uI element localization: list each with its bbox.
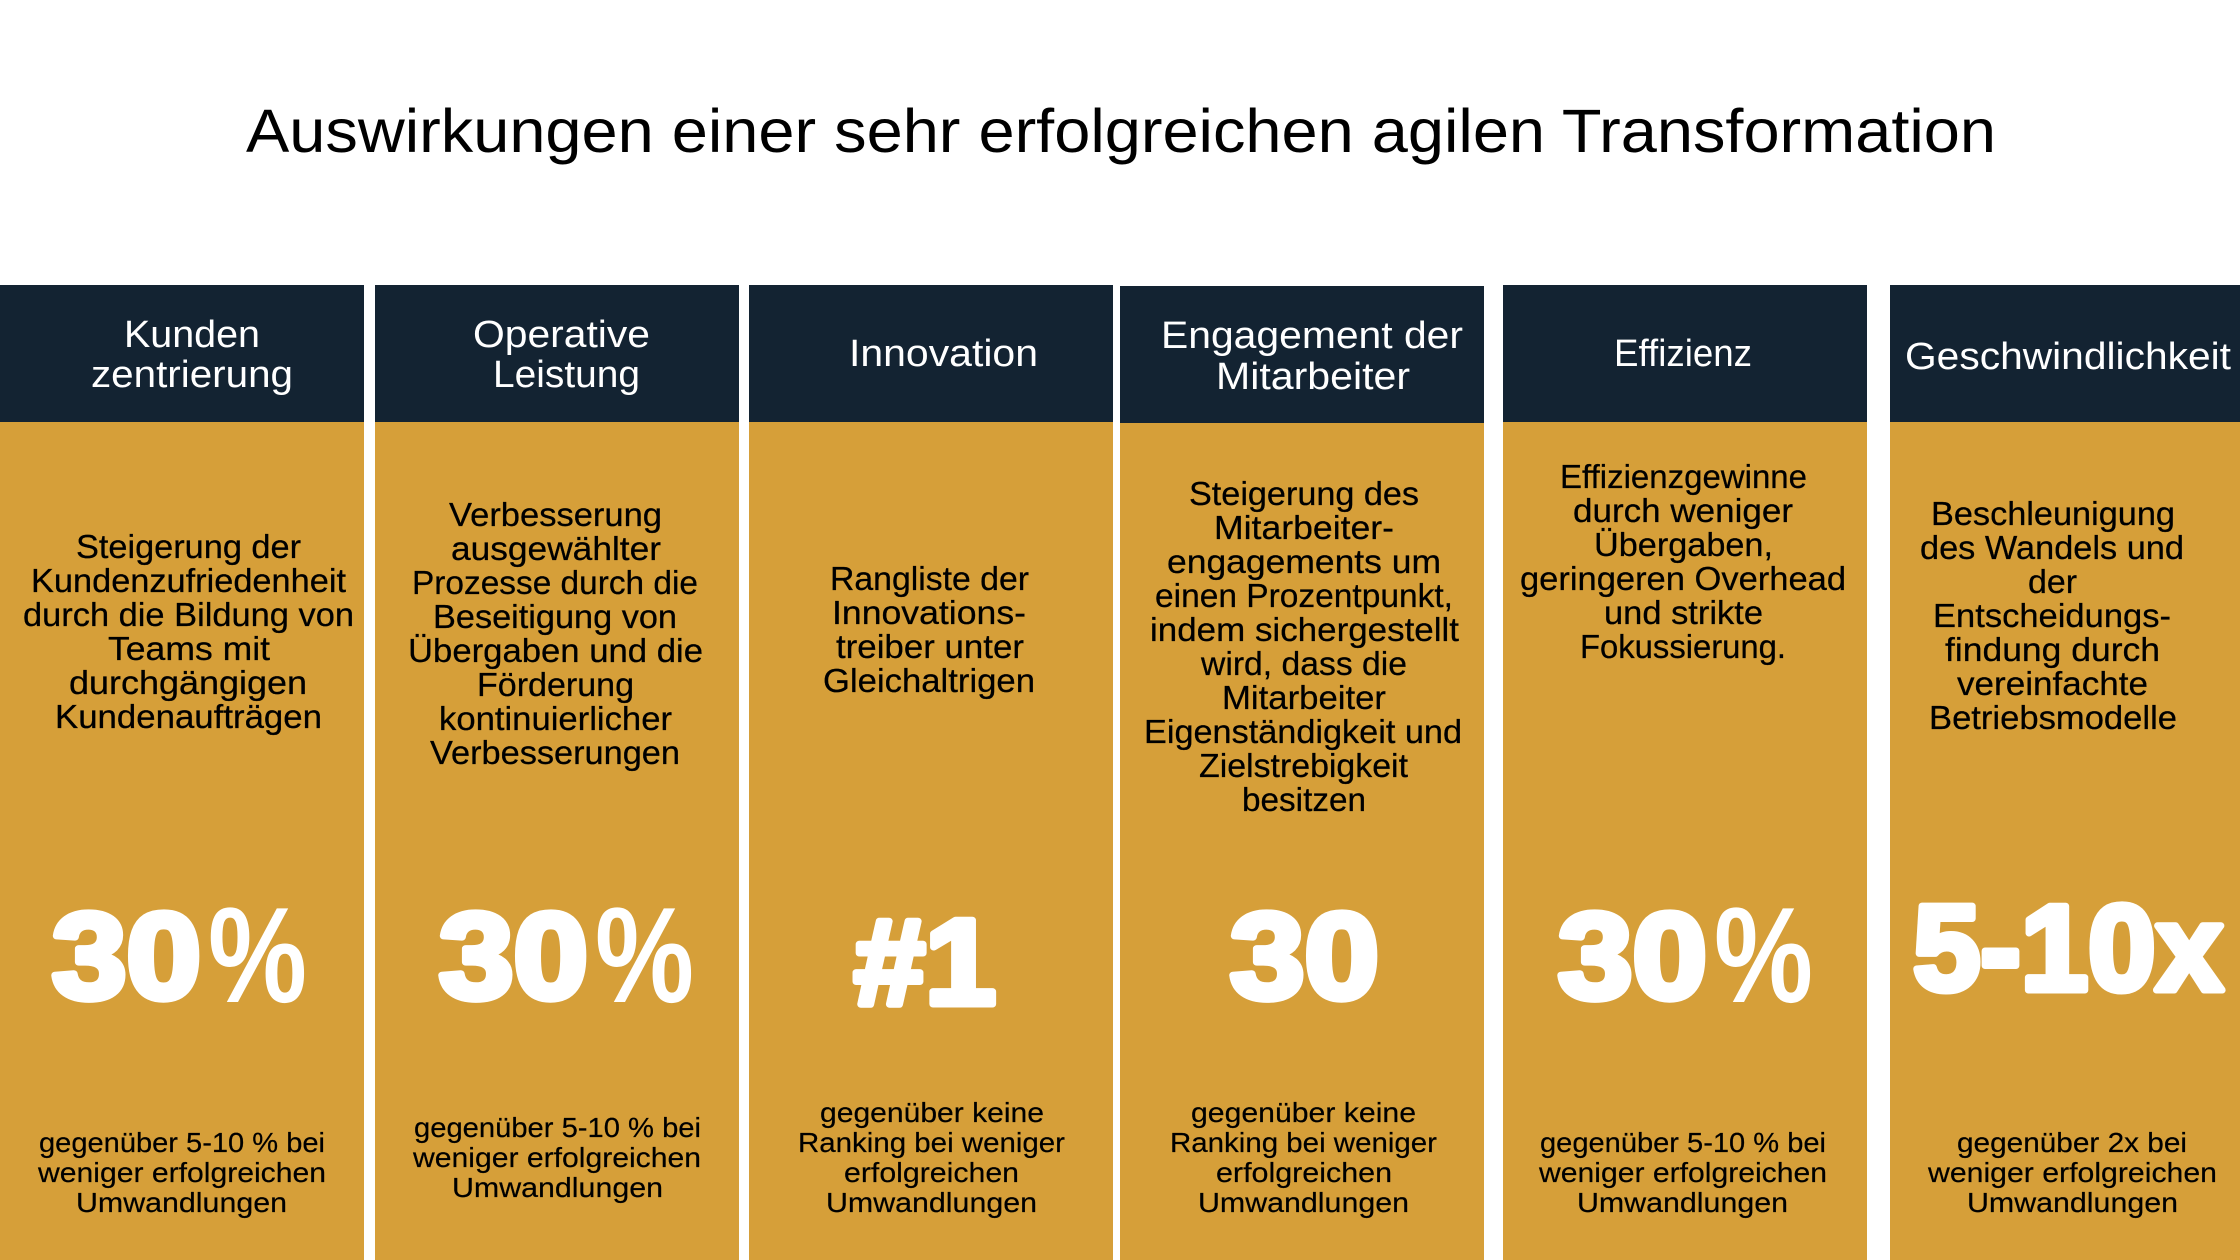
description text: [408, 496, 703, 771]
description text: Mitarbeiter: [1222, 679, 1386, 716]
header: Kundenzentrierung: Kunden: [124, 314, 260, 356]
description text: Mitarbeiter-: [1214, 509, 1394, 546]
description text: Eigenständigkeit und: [1144, 713, 1462, 750]
header: Engagement der Mitarbeiter: Mitarbeiter: [1216, 356, 1410, 398]
comparison text: Umwandlungen: [826, 1187, 1037, 1218]
comparison text: Umwandlungen: [1967, 1187, 2178, 1218]
comparison text: gegenüber 5-10 % bei: [414, 1112, 701, 1143]
description text: Kundenzufriedenheit: [31, 562, 346, 599]
panel background: [1890, 422, 2240, 1260]
description text: Entscheidungs-: [1933, 597, 2171, 634]
header: Effizienz: Effizienz: [1614, 333, 1752, 375]
panel: Kundenzentrierung: [0, 285, 364, 1260]
description text: und strikte: [1604, 594, 1763, 631]
description text: treiber unter: [836, 628, 1024, 665]
comparison text: Umwandlungen: [1198, 1187, 1409, 1218]
description text: Steigerung der: [76, 528, 301, 565]
panel background: [749, 422, 1113, 1260]
header: Kundenzentrierung: zentrierung: [91, 354, 293, 396]
description text: Verbesserungen: [430, 734, 680, 771]
description text: des Wandels und: [1920, 529, 2184, 566]
description text: wird, dass die: [1200, 645, 1407, 682]
header: Innovation: Innovation: [849, 333, 1038, 375]
comparison text: weniger erfolgreichen: [37, 1157, 326, 1188]
description text: Prozesse durch die: [412, 564, 698, 601]
panel background: [1120, 423, 1484, 1260]
description text: Rangliste der: [830, 560, 1029, 597]
header: Operative Leistung: Leistung: [493, 354, 640, 396]
description text: Teams mit: [108, 630, 270, 667]
description text: geringeren Overhead: [1520, 560, 1846, 597]
big number: 30%: %: [595, 879, 694, 1031]
description text: kontinuierlicher: [439, 700, 672, 737]
comparison text: Umwandlungen: [1577, 1187, 1788, 1218]
big number: 30%: 30: [1558, 888, 1707, 1024]
big number: 30%: [52, 879, 307, 1031]
comparison text: gegenüber 2x bei: [1957, 1127, 2187, 1158]
comparison text: Ranking bei weniger: [798, 1127, 1065, 1158]
big number: 30%: %: [1714, 879, 1813, 1031]
header: Operative Leistung: Operative: [473, 314, 650, 356]
description text: Innovations-: [832, 594, 1026, 631]
description text: Effizienzgewinne: [1560, 458, 1807, 495]
description text: Beseitigung von: [433, 598, 677, 635]
description text: Steigerung des: [1189, 475, 1419, 512]
header: Operative Leistung: [375, 285, 739, 422]
header: Engagement der Mitarbeiter: Engagement der: [1161, 315, 1463, 357]
comparison text: erfolgreichen: [844, 1157, 1019, 1188]
comparison text: gegenüber keine: [820, 1097, 1044, 1128]
comparison text: [1170, 1097, 1437, 1218]
description text: [23, 528, 354, 735]
comparison text: weniger erfolgreichen: [1538, 1157, 1827, 1188]
description text: Gleichaltrigen: [823, 662, 1035, 699]
description text: Übergaben,: [1594, 526, 1773, 563]
description text: besitzen: [1242, 781, 1366, 818]
header: Geschwindlichkeit: Geschwindlichkeit: [1905, 336, 2231, 378]
comparison text: Ranking bei weniger: [1170, 1127, 1437, 1158]
big number: 30: 30: [1230, 888, 1379, 1024]
big number: 30%: %: [208, 879, 307, 1031]
header: Geschwindlichkeit: [1890, 285, 2240, 422]
description text: [1920, 495, 2184, 736]
description text: durchgängigen: [69, 664, 307, 701]
panel background: [1503, 422, 1867, 1260]
big number: 30%: 30: [52, 888, 201, 1024]
description text: Fokussierung.: [1580, 628, 1786, 665]
header: Innovation: [749, 285, 1113, 422]
header: Effizienz: [1503, 285, 1867, 422]
panel background: [375, 422, 739, 1260]
description text: engagements um: [1167, 543, 1441, 580]
panel: Geschwindlichkeit: [1890, 285, 2240, 1260]
title: Auswirkungen einer sehr erfolgreichen agilen Transformation: [246, 97, 1996, 165]
comparison text: [412, 1112, 701, 1203]
comparison text: [798, 1097, 1065, 1218]
panel background: [0, 422, 364, 1260]
comparison text: Umwandlungen: [452, 1172, 663, 1203]
comparison text: Umwandlungen: [76, 1187, 287, 1218]
description text: [1144, 475, 1462, 818]
comparison text: weniger erfolgreichen: [1927, 1157, 2217, 1188]
description text: vereinfachte: [1957, 665, 2148, 702]
description text: Übergaben und die: [408, 632, 703, 669]
comparison text: gegenüber 5-10 % bei: [1540, 1127, 1826, 1158]
comparison text: erfolgreichen: [1216, 1157, 1392, 1188]
panel: Engagement der Mitarbeiter: [1120, 286, 1484, 1260]
description text: [823, 560, 1035, 699]
description text: Kundenaufträgen: [55, 698, 322, 735]
description text: ausgewählter: [451, 530, 661, 567]
big number: 30%: [1558, 879, 1813, 1031]
big number: #1: #1: [854, 894, 996, 1030]
description text: indem sichergestellt: [1150, 611, 1459, 648]
description text: Förderung: [477, 666, 634, 703]
description text: Zielstrebigkeit: [1199, 747, 1408, 784]
description text: Betriebsmodelle: [1929, 699, 2177, 736]
description text: einen Prozentpunkt,: [1155, 577, 1453, 614]
comparison text: gegenüber 5-10 % bei: [39, 1127, 325, 1158]
description text: durch weniger: [1573, 492, 1793, 529]
description text: durch die Bildung von: [23, 596, 354, 633]
comparison text: [37, 1127, 326, 1218]
comparison text: weniger erfolgreichen: [412, 1142, 701, 1173]
big number: 30%: 30: [439, 888, 588, 1024]
big number: 30%: [439, 879, 694, 1031]
big number: 5-10x: 5-10x: [1913, 880, 2223, 1016]
description text: der: [2028, 563, 2077, 600]
panel: Innovation: [749, 285, 1113, 1260]
panel: Operative Leistung: [375, 285, 739, 1260]
comparison text: gegenüber keine: [1191, 1097, 1416, 1128]
description text: findung durch: [1945, 631, 2160, 668]
description text: Verbesserung: [449, 496, 662, 533]
comparison text: [1538, 1127, 1827, 1218]
header: Engagement der Mitarbeiter: [1120, 286, 1484, 423]
description text: [1520, 458, 1846, 665]
comparison text: [1927, 1127, 2217, 1218]
panel: Effizienz: [1503, 285, 1867, 1260]
header: Kundenzentrierung: [0, 285, 364, 422]
description text: Beschleunigung: [1931, 495, 2175, 532]
